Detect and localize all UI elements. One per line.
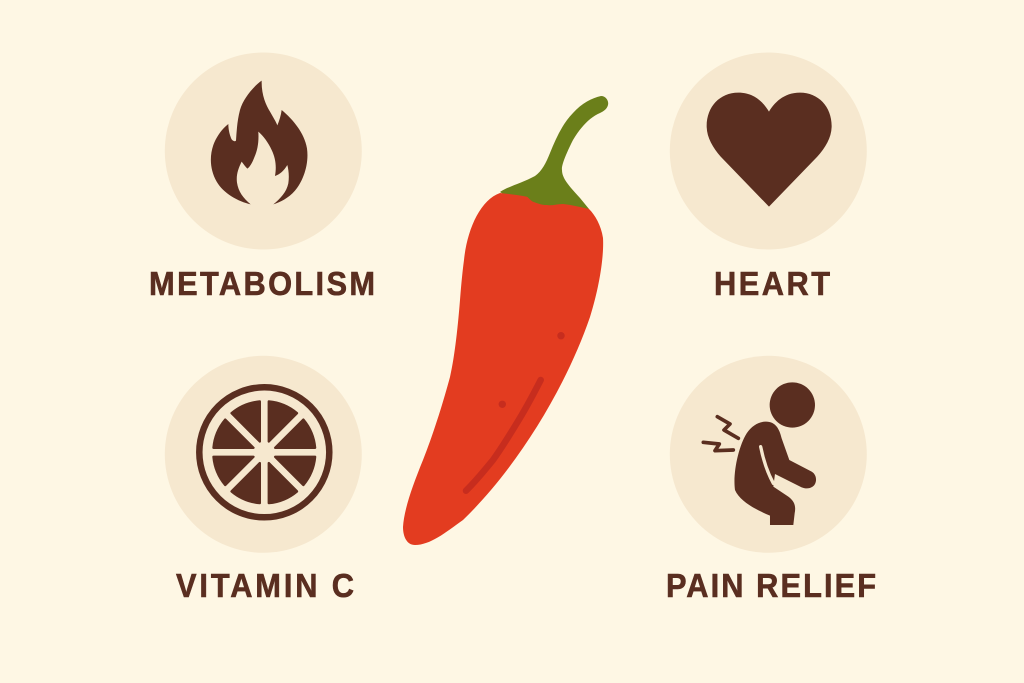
icon: person with back pain <box>703 382 816 525</box>
pepper highlight streak <box>466 380 541 491</box>
icon: citrus slice <box>199 387 329 517</box>
heading: heart: HEART <box>714 265 830 302</box>
icon: heart <box>707 93 832 207</box>
icon circle: metabolism <box>165 52 362 250</box>
illustration: chili pepper <box>403 96 608 545</box>
panel: pain relief <box>666 356 876 604</box>
icon: flame <box>211 81 307 204</box>
pepper stem <box>500 96 608 210</box>
pepper body <box>403 193 603 545</box>
pepper seed dot <box>499 401 506 408</box>
heading: metabolism: METABOLISM <box>149 265 375 302</box>
panel: heart <box>670 52 867 302</box>
pepper seed dot <box>557 332 565 339</box>
icon circle: pain relief <box>670 356 867 553</box>
icon circle: vitamin c <box>165 356 362 553</box>
icon circle: heart <box>670 52 867 250</box>
panel: vitamin c <box>165 356 362 604</box>
heading: vitamin c: VITAMIN C <box>176 567 354 604</box>
heading: pain relief: PAIN RELIEF <box>666 567 876 604</box>
panel: metabolism <box>149 52 375 302</box>
